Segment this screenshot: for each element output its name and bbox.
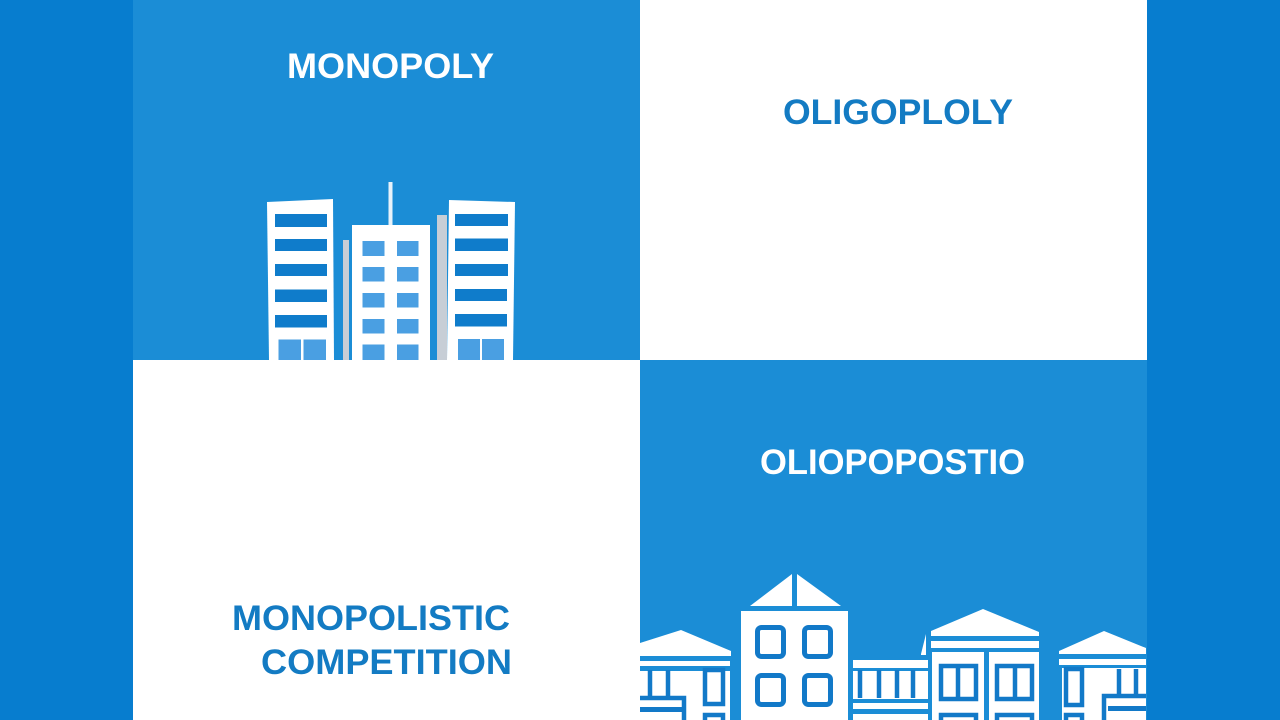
building: right house <box>1059 631 1146 720</box>
heading: monopoly: MONOPOLY <box>287 47 494 86</box>
building: central tower <box>741 574 848 720</box>
heading: oliopopostio: OLIOPOPOSTIO <box>760 443 1025 482</box>
panel: monopoly <box>133 0 640 360</box>
icon: three tower buildings <box>267 182 515 360</box>
heading: monopolistic competition: MONOPOLISTIC <box>232 599 510 638</box>
heading: oligopoly: OLIGOPLOLY <box>783 93 1013 132</box>
building: right-centre house <box>931 609 1039 720</box>
building: left house <box>640 630 731 720</box>
heading: monopolistic competition: COMPETITION <box>261 643 512 682</box>
panel: oliopopostio <box>640 360 1147 720</box>
panel: oligopoly <box>640 0 1147 360</box>
building: low connector <box>853 634 928 720</box>
icon: row of low-rise buildings <box>640 574 1146 720</box>
panel: monopolistic competition <box>133 360 640 720</box>
heading: monopolistic competition <box>232 599 512 682</box>
